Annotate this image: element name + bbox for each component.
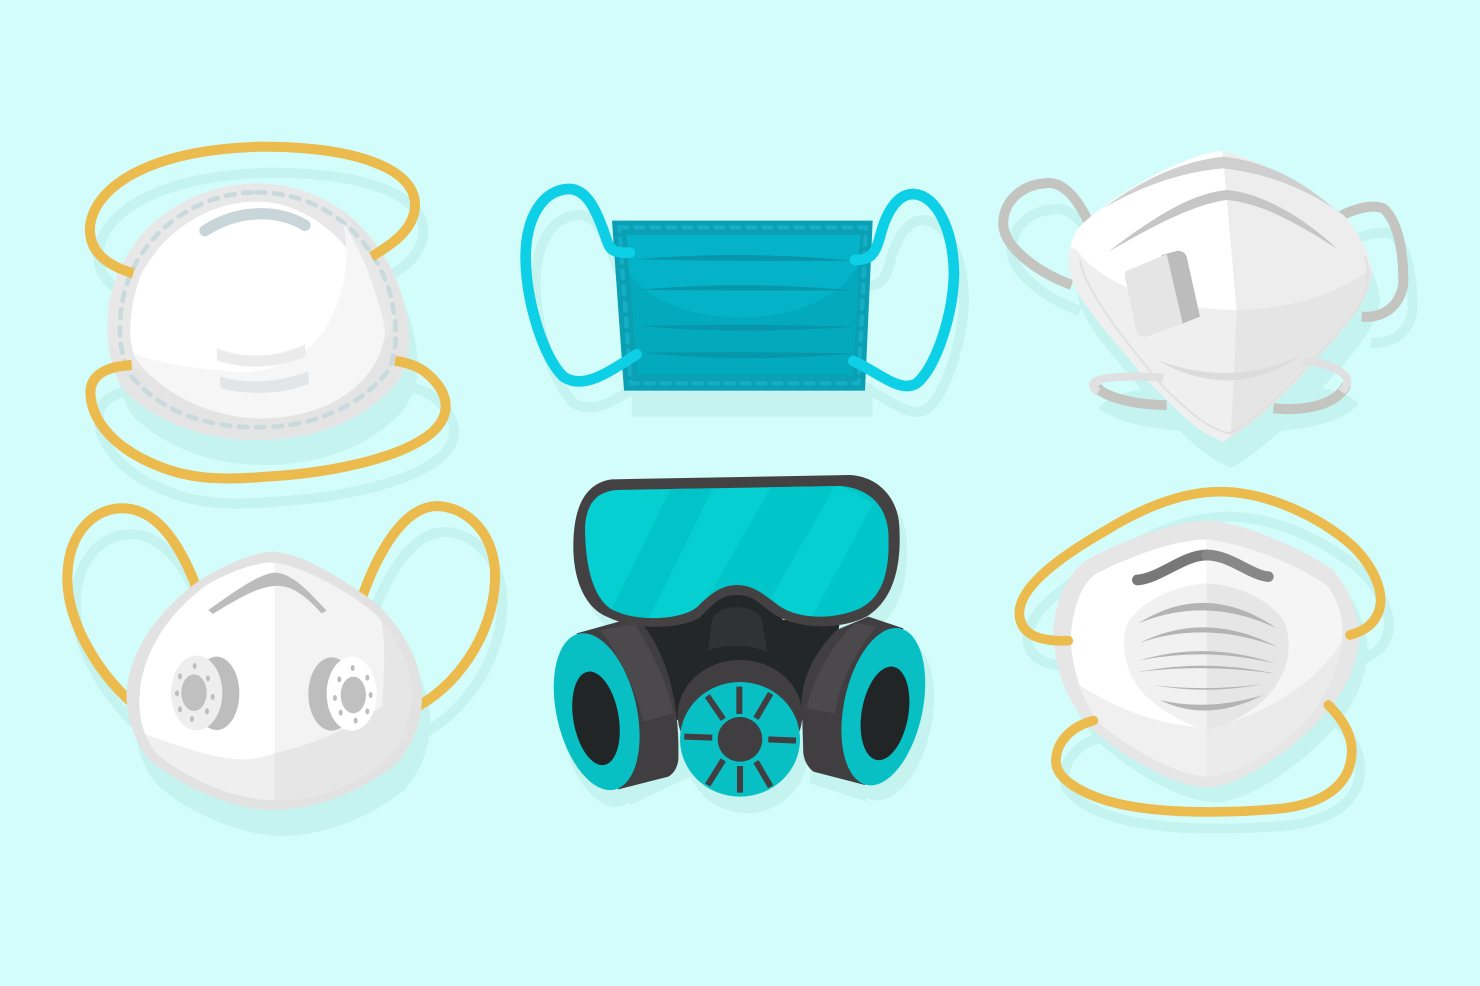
shadow: pleated respirator xyxy=(1028,517,1389,829)
mask: bottom-right pleated respirator xyxy=(1019,492,1389,829)
shadow: gas mask xyxy=(546,488,948,815)
valve: left xyxy=(171,656,239,730)
cartridge: right body xyxy=(802,617,903,785)
cartridge: right opening xyxy=(828,620,938,793)
shadow: cup respirator xyxy=(98,173,454,504)
filter: housing xyxy=(678,660,802,770)
body: mask edge xyxy=(612,221,873,391)
body: inner panel xyxy=(627,235,861,375)
mask: blue surgical mask xyxy=(526,189,964,417)
mask: top-left cup respirator with yellow straps xyxy=(90,147,454,504)
body: respirator panels xyxy=(1067,537,1347,780)
nose strip xyxy=(208,573,327,614)
stitching: dashed seam xyxy=(120,192,396,427)
body: respirator rim xyxy=(126,552,422,810)
illustration: six protective masks xyxy=(62,142,1418,836)
mask: top-right folded respirator with valve xyxy=(1003,140,1413,468)
edge seam xyxy=(1080,257,1368,433)
goggles: lens xyxy=(585,486,889,618)
shade: cup crescent xyxy=(134,223,385,418)
nose creases xyxy=(1103,157,1337,252)
valve xyxy=(1125,251,1200,337)
mask: bottom-left respirator with twin valves xyxy=(67,506,502,836)
body: respirator rim xyxy=(1053,521,1359,787)
cartridge: left opening xyxy=(540,625,654,799)
chin crease xyxy=(1157,355,1302,380)
valve: right xyxy=(308,657,377,731)
shadow: surgical mask xyxy=(536,215,964,417)
body: respirator panels xyxy=(140,562,384,800)
filter: teal disc xyxy=(680,682,800,797)
pleats xyxy=(635,255,855,358)
straps: cyan loops xyxy=(526,189,954,386)
mask: gas mask with goggles and filters xyxy=(540,475,948,815)
goggles: lens bands xyxy=(612,486,888,618)
filter panel xyxy=(1124,583,1289,730)
straps: yellow bands xyxy=(1019,492,1381,812)
body: cup respirator rim xyxy=(107,183,409,440)
stitching: dashes xyxy=(619,227,866,383)
body: white cup xyxy=(130,202,385,418)
nose strip xyxy=(1137,555,1207,580)
pleat marks xyxy=(217,344,309,393)
nose highlight xyxy=(708,607,767,652)
shadow: twin valve respirator xyxy=(76,532,502,836)
body: folded respirator panels xyxy=(1068,151,1372,442)
straps: yellow ear loops xyxy=(67,506,495,708)
nose strip xyxy=(205,214,305,231)
ear loops: back xyxy=(1003,183,1403,409)
highlight: upper panel xyxy=(627,235,861,317)
face piece xyxy=(633,620,840,737)
pleat lines xyxy=(1138,603,1278,711)
nose piece xyxy=(678,588,793,677)
shade: rim right side xyxy=(108,205,409,440)
filter: hub and spokes xyxy=(684,687,796,793)
cartridge: left highlight xyxy=(600,624,673,722)
shadow: folded respirator xyxy=(1012,177,1413,468)
cartridge: right highlight xyxy=(807,623,877,713)
ear loops: front xyxy=(1093,362,1347,392)
cartridge: left body xyxy=(577,617,678,789)
goggles: frame xyxy=(573,475,900,627)
straps: yellow loops xyxy=(90,147,446,479)
